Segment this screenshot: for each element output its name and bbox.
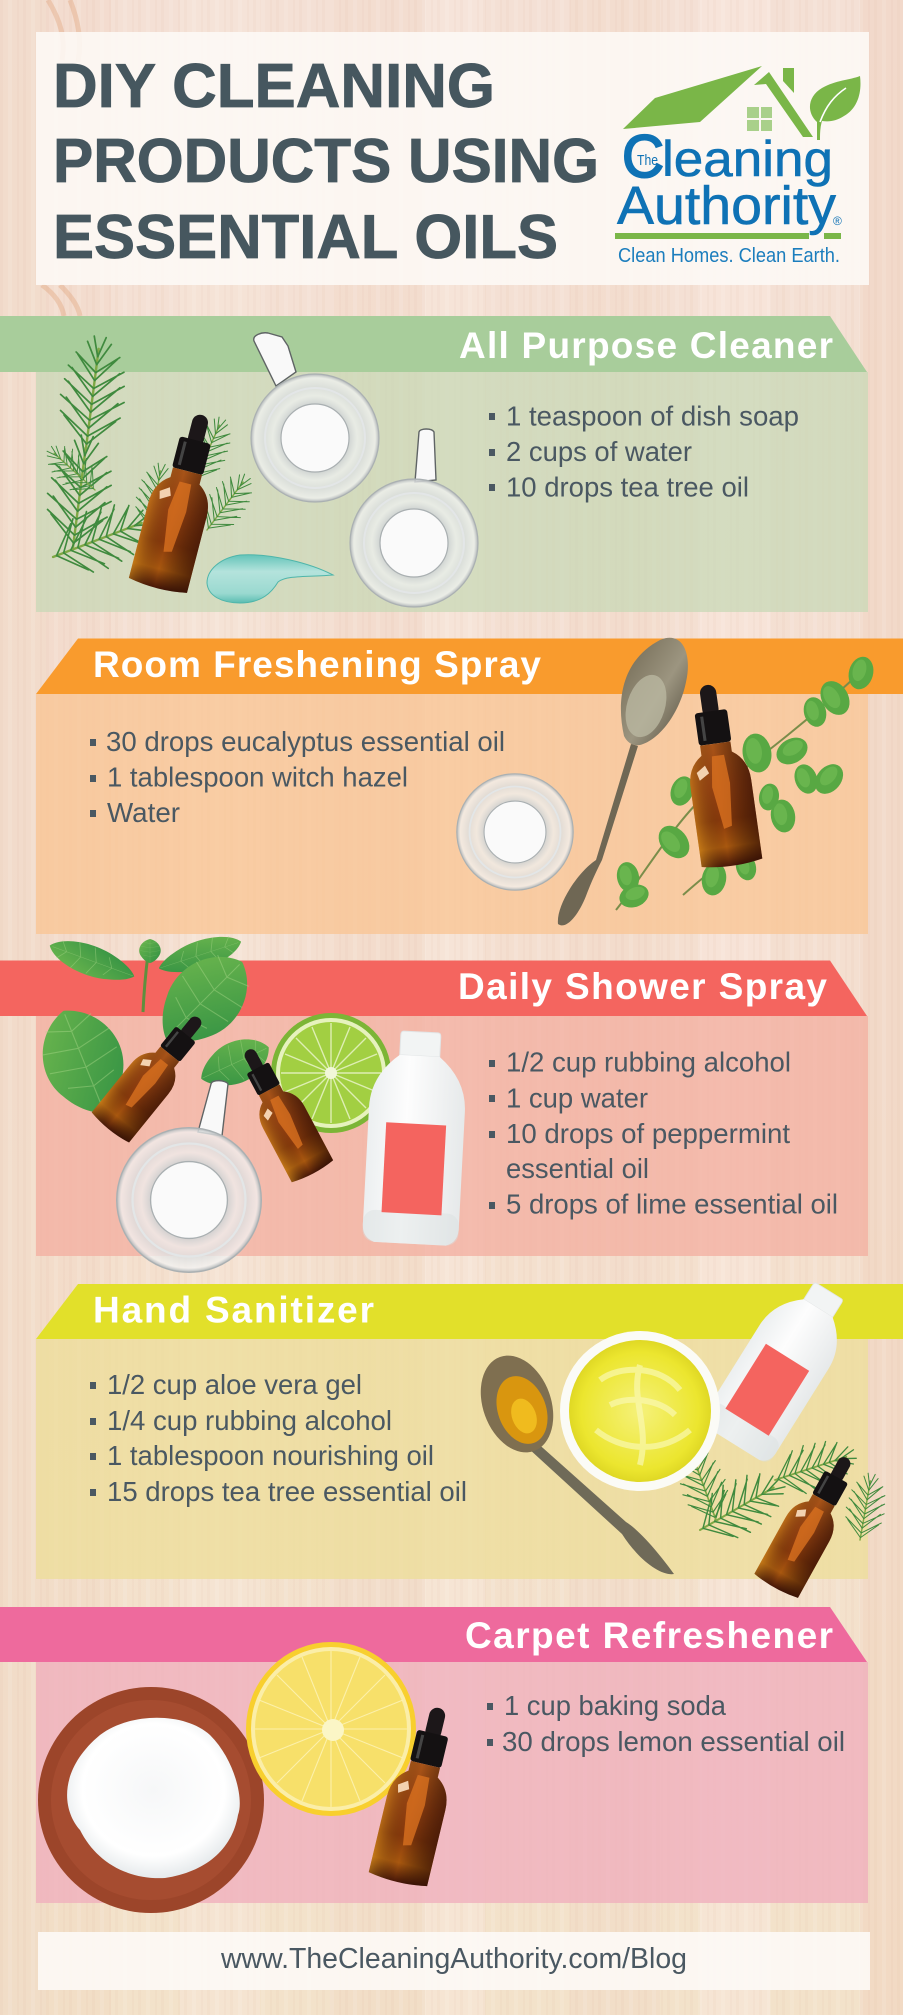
illustration: dish soap	[207, 555, 333, 603]
illustration: spoon of honey	[468, 1345, 674, 1574]
heading: All Purpose Cleaner	[459, 325, 833, 366]
logo: The Cleaning Authority: The	[637, 152, 658, 169]
website url: www.TheCleaningAuthority.com/Blog	[220, 1943, 687, 1975]
ingredients list	[90, 1369, 467, 1507]
illustration: eucalyptus branch	[615, 654, 877, 911]
illustration: rubbing alcohol bottle	[699, 1269, 864, 1465]
ingredients list: essential oil	[506, 1153, 649, 1184]
title: ESSENTIAL OILS	[53, 203, 558, 272]
ingredients list: 2 cups of water	[506, 436, 692, 467]
footer bar	[38, 1932, 870, 1990]
heading: Hand Sanitizer	[93, 1290, 374, 1330]
ingredients list: 30 drops lemon essential oil	[502, 1726, 845, 1757]
ingredients list: Water	[107, 797, 180, 828]
ingredients list	[489, 400, 799, 502]
illustration: silver spoon	[558, 638, 688, 925]
illustration: tea tree sprig	[668, 1431, 891, 1554]
ingredients list: 1/4 cup rubbing alcohol	[107, 1405, 392, 1436]
illustration: glass bowl	[457, 774, 573, 890]
title	[53, 52, 599, 272]
ingredients list: 1/2 cup aloe vera gel	[107, 1369, 362, 1400]
banner	[0, 960, 867, 1016]
banner	[0, 316, 867, 372]
logo: The Cleaning Authority: Clean Homes. Clean Earth.	[618, 245, 840, 267]
ingredients list	[487, 1690, 845, 1757]
ingredients list: 1 cup baking soda	[504, 1690, 726, 1721]
illustration: glass cup one	[251, 333, 379, 502]
logo: The Cleaning Authority: C	[622, 123, 664, 190]
illustration: glass cup	[117, 1081, 261, 1272]
heading: Carpet Refreshener	[465, 1615, 833, 1656]
ingredients list: 1 tablespoon witch hazel	[107, 762, 408, 792]
illustration: bottle of tea tree oil	[128, 407, 231, 596]
banner	[36, 1284, 903, 1339]
illustration: bowl of aloe gel	[560, 1331, 720, 1491]
illustration: glass cup two	[350, 429, 478, 607]
ingredients list: 1 tablespoon nourishing oil	[107, 1440, 434, 1471]
illustration: rubbing alcohol bottle	[362, 1029, 469, 1246]
ingredients list: 5 drops of lime essential oil	[506, 1188, 838, 1220]
logo: The Cleaning Authority: leaning	[662, 131, 833, 187]
ingredients list: 10 drops tea tree oil	[506, 472, 749, 502]
illustration: bottle of eucalyptus oil	[677, 681, 763, 870]
panel: room freshening spray	[36, 638, 903, 934]
panel: all purpose cleaner	[0, 316, 868, 612]
illustration: mint leaves	[27, 928, 277, 1128]
header panel	[36, 32, 869, 285]
ingredients list: 1/2 cup rubbing alcohol	[506, 1046, 791, 1078]
ingredients list	[90, 726, 505, 828]
banner	[0, 1607, 867, 1662]
illustration: tea tree sprig	[37, 333, 263, 585]
ingredients list: 1 teaspoon of dish soap	[506, 400, 799, 432]
banner	[36, 638, 903, 694]
illustration: bottle of tea tree oil	[753, 1446, 869, 1600]
title: PRODUCTS USING	[53, 127, 599, 196]
panel: hand sanitizer	[36, 1269, 903, 1600]
ingredients list: 1 cup water	[506, 1082, 648, 1114]
ingredients list: 10 drops of peppermint	[506, 1118, 790, 1149]
panel: daily shower spray	[0, 928, 868, 1272]
panel: carpet refreshener	[0, 1607, 868, 1913]
heading: Room Freshening Spray	[93, 644, 541, 685]
logo: The Cleaning Authority	[615, 66, 860, 267]
illustration: bottle of peppermint oil	[90, 1003, 218, 1144]
title: DIY CLEANING	[53, 52, 495, 121]
illustration: lemon slice	[246, 1642, 416, 1816]
illustration: plate of baking soda	[38, 1687, 264, 1913]
logo: The Cleaning Authority: ®	[833, 214, 842, 228]
heading: Daily Shower Spray	[458, 966, 827, 1007]
illustration: bottle of lime oil	[227, 1039, 334, 1184]
ingredients list	[489, 1046, 838, 1220]
ingredients list: 15 drops tea tree essential oil	[107, 1476, 467, 1507]
logo: The Cleaning Authority: Authority	[617, 176, 836, 236]
illustration: lime slice	[271, 1013, 391, 1133]
illustration: bottle of lemon oil	[368, 1701, 468, 1889]
ingredients list: 30 drops eucalyptus essential oil	[106, 726, 505, 757]
